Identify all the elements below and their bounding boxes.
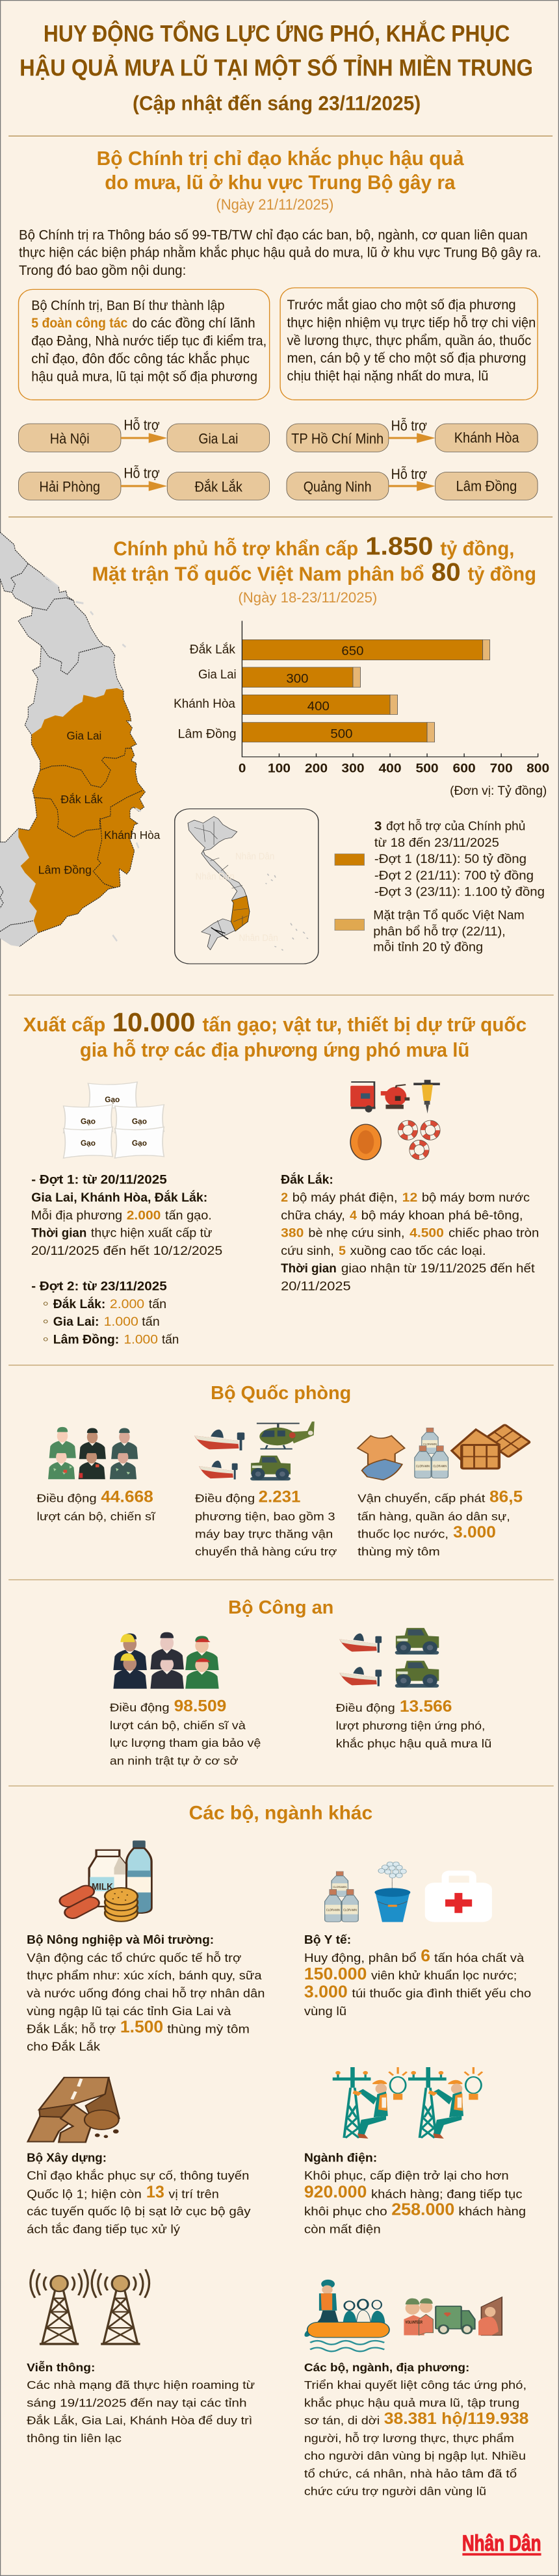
icon: food — [57, 1840, 151, 1922]
panel: local support: thực hiện nhiệm vụ trực tiếp hỗ trợ chi viện — [287, 315, 536, 330]
text: health ministry: 150.000 — [304, 1964, 367, 1983]
bar chart: 300 — [286, 671, 308, 686]
mini map of Vietnam: Nhân Dân — [239, 933, 278, 944]
text: health ministry — [304, 1933, 531, 2018]
support pairs: Hỗ trợ — [391, 418, 427, 434]
legend: -Đợt 2 (21/11): 700 tỷ đồng — [374, 868, 534, 882]
text: equipment for Đắk Lắk: chữa cháy, — [281, 1207, 345, 1222]
text: vehicles deployed: phương tiện, bao gồm 3 — [195, 1510, 335, 1523]
bar chart: 500 — [330, 726, 352, 741]
heading: government support: 1.850 — [365, 532, 433, 560]
text: equipment for Đắk Lắk: cứu sinh, — [281, 1243, 334, 1257]
mini map of Vietnam: Nhân Dân — [235, 851, 274, 862]
text: electricity sector: Khôi phục, cấp điện trở lại cho hơn — [304, 2169, 509, 2182]
text: rice batches: 2.000 — [110, 1296, 144, 1311]
text: equipment for Đắk Lắk: bộ máy bơm nước — [422, 1190, 530, 1204]
text: police vehicles: lượt phương tiện ứng phó, — [336, 1719, 485, 1732]
text: localities — [304, 2361, 528, 2498]
mini map of Vietnam: Nhân Dân — [196, 871, 235, 882]
text: agriculture ministry: thùng mỳ tôm — [167, 2022, 250, 2036]
panel: working delegations: đạo Đảng, Nhà nước tiếp tục đi kiểm tra, — [31, 333, 266, 348]
bar chart: 700 — [490, 761, 513, 775]
panel: working delegations: do các đồng chí lãnh — [132, 315, 255, 331]
title: (Cập nhật đến sáng 23/11/2025) — [133, 91, 421, 114]
icon: rescue and volunteers: VOLUNTEER — [406, 2320, 422, 2325]
text: rice batches: - Đợt 2: từ 23/11/2025 — [31, 1279, 167, 1293]
text: agriculture ministry: và nước uống đóng chai hỗ trợ nhân dân — [27, 1987, 265, 2000]
text: goods delivered: 3.000 — [453, 1523, 496, 1541]
map of central Vietnam: Khánh Hòa — [104, 829, 161, 842]
support pairs: Gia Lai — [198, 430, 238, 446]
text: telecom: Đắk Lắk, Gia Lai, Khánh Hòa để duy trì — [27, 2414, 252, 2427]
bar chart: 0 — [239, 761, 246, 775]
bar chart: 300 — [341, 761, 365, 775]
icon: relief goods — [358, 1424, 530, 1480]
text: construction ministry: ách tắc đang tiếp tục xử lý — [27, 2222, 181, 2236]
text: construction ministry: Chỉ đạo khắc phục sự cố, thông tuyến — [27, 2169, 249, 2182]
icon: rice sacks — [64, 1082, 164, 1158]
text: health ministry: 3.000 — [304, 1981, 348, 2001]
map of central Vietnam: Đắk Lắk — [60, 793, 103, 806]
text: police vehicles — [336, 1697, 491, 1750]
support pairs: Đắk Lắk — [194, 478, 242, 495]
text: telecom: Viễn thông: — [27, 2361, 95, 2374]
text: agriculture ministry: vùng ngập lũ tại các tỉnh Gia Lai và — [27, 2005, 231, 2018]
text: rice batches: Đắk Lắk: — [53, 1296, 105, 1311]
text: construction ministry: 13 — [146, 2182, 164, 2201]
text: equipment for Đắk Lắk: xuồng cao tốc các loại. — [350, 1243, 486, 1257]
support pairs: Khánh Hòa — [454, 430, 519, 446]
text: electricity sector: 920.000 — [304, 2182, 367, 2201]
panel: Ministry of National Defence and Public Security — [8, 1383, 554, 1786]
support pairs: TP Hồ Chí Minh — [291, 430, 384, 446]
text: rice batches — [31, 1172, 222, 1346]
text: localities: chức cứu trợ người dân vùng lũ — [304, 2485, 486, 2498]
text: equipment for Đắk Lắk: 4.500 — [410, 1226, 444, 1240]
text: rice batches: 1.000 — [124, 1332, 158, 1346]
text: equipment for Đắk Lắk: Thời gian — [281, 1261, 337, 1275]
panel: local support: Trước mắt giao cho một số địa phương — [287, 297, 516, 313]
text: equipment for Đắk Lắk: 5 — [339, 1243, 346, 1257]
legend: 3 — [374, 819, 382, 833]
support pairs: Hỗ trợ — [391, 466, 427, 482]
map of central Vietnam — [0, 532, 161, 947]
text: rice batches: Gia Lai, Khánh Hòa, Đắk Lắk: — [31, 1190, 207, 1204]
bar chart: Đắk Lắk — [190, 642, 236, 656]
text: rice batches: Lâm Đồng: — [53, 1332, 119, 1346]
bar chart: 800 — [526, 761, 549, 775]
text: electricity sector: khách hàng; đang tiếp tục — [371, 2187, 523, 2200]
icon: power workers — [333, 2067, 482, 2139]
text: construction ministry — [27, 2151, 251, 2236]
heading: Bộ Chính trị: (Ngày 21/11/2025) — [216, 196, 333, 213]
text: health ministry: Bộ Y tế: — [304, 1933, 351, 1946]
text: electricity sector: khôi phục cho — [304, 2205, 387, 2218]
icon: telecom towers — [31, 2269, 150, 2345]
bar chart — [174, 621, 549, 798]
text: vehicles deployed — [195, 1488, 337, 1558]
text: rice batches: Thời gian — [31, 1226, 86, 1240]
text: police personnel: an ninh trật tự ở cơ sở — [110, 1754, 238, 1768]
text: equipment for Đắk Lắk: 2 — [281, 1190, 288, 1204]
text: electricity sector: 258.000 — [391, 2199, 454, 2219]
bar chart: 600 — [453, 761, 476, 775]
text: goods delivered: 86,5 — [489, 1488, 523, 1506]
icon: landslide road — [28, 2078, 120, 2142]
text: rice batches: tấn — [162, 1332, 179, 1346]
text: equipment for Đắk Lắk: 20/11/2025 — [281, 1279, 351, 1293]
text: telecom: thông tin liên lạc — [27, 2432, 122, 2445]
text: construction ministry: các tuyến quốc lộ bị sạt lở cục bộ gây — [27, 2205, 251, 2218]
map of central Vietnam: Lâm Đồng — [38, 864, 92, 877]
bar chart: Khánh Hòa — [174, 696, 236, 710]
text: equipment for Đắk Lắk: Đắk Lắk: — [281, 1172, 333, 1187]
panel: rice and reserve supplies — [8, 995, 554, 1365]
text: health ministry: Huy động, phân bổ — [304, 1951, 417, 1964]
text: equipment for Đắk Lắk: bè nhẹ cứu sinh, — [308, 1226, 405, 1240]
legend: mỗi tỉnh 20 tỷ đồng — [373, 940, 483, 954]
bar chart: 200 — [305, 761, 328, 775]
legend: phân bổ hỗ trợ (22/11), — [373, 923, 506, 938]
text: telecom — [27, 2361, 255, 2445]
support pairs: Hải Phòng — [39, 478, 100, 495]
support pairs: Hà Nội — [50, 430, 90, 446]
text: rice batches: tấn gạo. — [165, 1207, 212, 1222]
panel: local support: về lương thực, thực phẩm, quần áo, thuốc — [287, 333, 531, 348]
support pairs — [19, 417, 538, 500]
text: police personnel: 98.509 — [174, 1697, 226, 1715]
text: vehicles deployed: 2.231 — [259, 1488, 300, 1506]
heading: rice — [23, 1008, 526, 1061]
text: police personnel: lượt cán bộ, chiến sĩ và — [110, 1719, 246, 1732]
bar chart: 650 — [341, 643, 363, 658]
text: rice batches: tấn — [149, 1296, 166, 1311]
text: equipment for Đắk Lắk — [281, 1172, 539, 1293]
icon: rice sacks: Gạo — [132, 1139, 147, 1147]
text: agriculture ministry: Đắk Lắk; hỗ trợ — [27, 2022, 116, 2036]
text: agriculture ministry: Bộ Nông nghiệp và Môi trường: — [27, 1933, 214, 1946]
text: localities: Các bộ, ngành, địa phương: — [304, 2361, 469, 2374]
panel: working delegations: Bộ Chính trị, Ban Bí thư thành lập — [31, 298, 225, 313]
text: construction ministry: Bộ Xây dựng: — [27, 2151, 107, 2165]
text: agriculture ministry — [27, 1933, 265, 2053]
bar chart: 100 — [268, 761, 291, 775]
heading: government support: Mặt trận Tổ quốc Việt Nam phân bổ — [92, 563, 424, 585]
text: health ministry: vùng lũ — [304, 2005, 346, 2018]
panel: working delegations: hậu quả mưa, lũ tại một số địa phương — [31, 368, 257, 385]
text: police vehicles: 13.566 — [400, 1697, 452, 1716]
support pairs: Hỗ trợ — [124, 417, 160, 433]
intro paragraph: Trong đó bao gồm nội dung: — [19, 263, 186, 278]
panel: local support — [280, 288, 538, 400]
heading: Bộ Chính trị: Bộ Chính trị chỉ đạo khắc phục hậu quả — [97, 147, 464, 170]
text: soldiers deployed: lượt cán bộ, chiến sĩ — [36, 1510, 155, 1523]
heading: government support: 80 — [432, 558, 461, 586]
text: construction ministry: Quốc lộ 1; hiện còn — [27, 2187, 142, 2200]
icon: equipment — [350, 1080, 440, 1160]
text: equipment for Đắk Lắk: 12 — [402, 1190, 417, 1204]
map of central Vietnam: Gia Lai — [67, 730, 101, 742]
text: electricity sector: còn mất điện — [304, 2222, 381, 2236]
legend: -Đợt 1 (18/11): 50 tỷ đồng — [374, 851, 526, 866]
text: goods delivered: thùng mỳ tôm — [358, 1545, 440, 1558]
text: vehicles deployed: chuyển thả hàng cứu trợ — [195, 1545, 337, 1558]
text: agriculture ministry: Vận động các tổ chức quốc tế hỗ trợ — [27, 1951, 242, 1964]
text: electricity sector: khách hàng — [458, 2205, 526, 2218]
text: rice batches: - Đợt 1: từ 20/11/2025 — [31, 1172, 167, 1187]
text: rice batches: thực hiện xuất cấp từ — [91, 1226, 212, 1240]
panel: local support: chịu thiệt hại nặng nhất do mưa, lũ — [287, 368, 488, 384]
title — [20, 19, 533, 114]
text: telecom: Các nhà mạng đã thực hiện roaming từ — [27, 2378, 255, 2391]
legend: đợt hỗ trợ của Chính phủ — [386, 819, 525, 833]
icon: food: MILK — [92, 1881, 113, 1892]
text: goods delivered: thuốc lọc nước, — [358, 1527, 448, 1541]
icon: rice sacks: Gạo — [81, 1117, 96, 1126]
bar chart: Lâm Đồng — [178, 726, 237, 741]
panel: working delegations: chỉ đạo, đôn đốc công tác khắc phục — [31, 351, 250, 367]
icon: soldiers — [48, 1427, 138, 1479]
heading: rice: Xuất cấp — [23, 1013, 105, 1036]
heading: Bộ Quốc phòng: Bộ Quốc phòng — [211, 1383, 351, 1404]
support pairs: Quảng Ninh — [304, 478, 372, 495]
bar chart: 500 — [416, 761, 439, 775]
legend — [335, 819, 545, 954]
icon: medical supplies — [325, 1862, 492, 1922]
bar chart: 400 — [307, 699, 330, 713]
text: police vehicles: Điều động — [336, 1701, 395, 1714]
text: soldiers deployed — [36, 1488, 155, 1523]
heading: government support: Chính phủ hỗ trợ khẩn cấp — [113, 538, 358, 560]
text: telecom: sáng 19/11/2025 đến nay tại các tỉnh — [27, 2396, 247, 2409]
heading: government support — [92, 532, 536, 606]
text: agriculture ministry: cho Đắk Lắk — [27, 2040, 101, 2053]
text: rice batches: 1.000 — [104, 1314, 138, 1328]
text: agriculture ministry: thực phẩm như: xúc xích, bánh quy, sữa — [27, 1969, 262, 1982]
text: construction ministry: vị trí trên — [168, 2187, 219, 2200]
text: electricity sector — [304, 2151, 526, 2236]
panel: telecom, localities and logo — [27, 2269, 541, 2556]
text: goods delivered — [358, 1488, 523, 1558]
heading: Bộ Chính trị: do mưa, lũ ở khu vực Trung Bộ gây ra — [105, 171, 456, 194]
icon: vehicles — [194, 1421, 315, 1480]
text: rice batches: 2.000 — [127, 1207, 161, 1222]
text: police personnel: Điều động — [110, 1701, 170, 1714]
heading: Bộ Chính trị — [97, 147, 464, 213]
panel: local support: men, cán bộ y tế cho một số địa phương — [287, 350, 526, 366]
panel: other ministries — [27, 1803, 531, 2236]
support pairs: Lâm Đồng — [456, 478, 517, 494]
icon: police officers — [113, 1632, 219, 1689]
text: health ministry: tấn hóa chất và — [434, 1951, 525, 1964]
support pairs: Hỗ trợ — [124, 465, 160, 482]
text: rice batches: 20/11/2025 đến hết 10/12/2025 — [31, 1243, 222, 1257]
panel: header and politburo directive — [8, 19, 552, 517]
intro paragraph — [19, 227, 541, 278]
icon: rice sacks: Gạo — [132, 1117, 147, 1126]
text: soldiers deployed: 44.668 — [101, 1488, 153, 1506]
text: goods delivered: tấn hàng, quần áo dân sự, — [358, 1510, 510, 1523]
icon: rice sacks: Gạo — [81, 1139, 96, 1147]
text: rice batches: tấn — [142, 1314, 160, 1328]
text: equipment for Đắk Lắk: 380 — [281, 1226, 304, 1240]
bar chart: Gia Lai — [198, 667, 237, 682]
heading: government support: tỷ đồng, — [440, 538, 514, 560]
panel: working delegations: 5 đoàn công tác — [31, 315, 127, 331]
text: health ministry: viên khử khuẩn lọc nước; — [371, 1969, 517, 1982]
bar chart: 400 — [378, 761, 402, 775]
panel: working delegations — [19, 289, 270, 400]
icon: rescue and volunteers — [303, 2280, 502, 2351]
text: equipment for Đắk Lắk: bộ máy khoan phá bê-tông, — [361, 1207, 523, 1222]
text: goods delivered: Vận chuyển, cấp phát — [358, 1491, 486, 1505]
panel: government funding — [0, 532, 549, 964]
text: police personnel: lực lượng tham gia bảo vệ — [110, 1736, 261, 1749]
text: rice batches: Mỗi địa phương — [31, 1207, 122, 1222]
heading: government support: (Ngày 18-23/11/2025) — [238, 590, 377, 606]
icon: police vehicles — [339, 1628, 439, 1688]
text: soldiers deployed: Điều động — [36, 1491, 97, 1505]
text: vehicles deployed: máy bay trực thăng vận — [195, 1527, 333, 1541]
icon: rice sacks: Gạo — [105, 1096, 120, 1104]
text: vehicles deployed: Điều động — [195, 1491, 255, 1505]
text: agriculture ministry: 1.500 — [120, 2017, 163, 2036]
text: equipment for Đắk Lắk: 4 — [350, 1207, 357, 1222]
heading: government support: tỷ đồng — [468, 563, 536, 585]
heading: other ministries: Các bộ, ngành khác — [189, 1803, 372, 1823]
text: health ministry: 6 — [421, 1946, 430, 1965]
heading: rice: 10.000 — [112, 1008, 196, 1037]
text: police personnel — [110, 1697, 261, 1768]
text: police vehicles: khắc phục hậu quả mưa lũ — [336, 1737, 491, 1750]
text: rice batches: Gia Lai: — [53, 1314, 99, 1328]
text: equipment for Đắk Lắk: bộ máy phát điện, — [292, 1190, 398, 1204]
legend: từ 18 đến 23/11/2025 — [374, 835, 499, 850]
text: localities: sơ tán, di dời — [304, 2414, 380, 2427]
mini map of Vietnam — [175, 809, 318, 964]
legend: Mặt trận Tổ quốc Việt Nam — [373, 908, 525, 922]
heading: Bộ Công an: Bộ Công an — [228, 1597, 333, 1617]
text: electricity sector: Ngành điện: — [304, 2151, 377, 2165]
